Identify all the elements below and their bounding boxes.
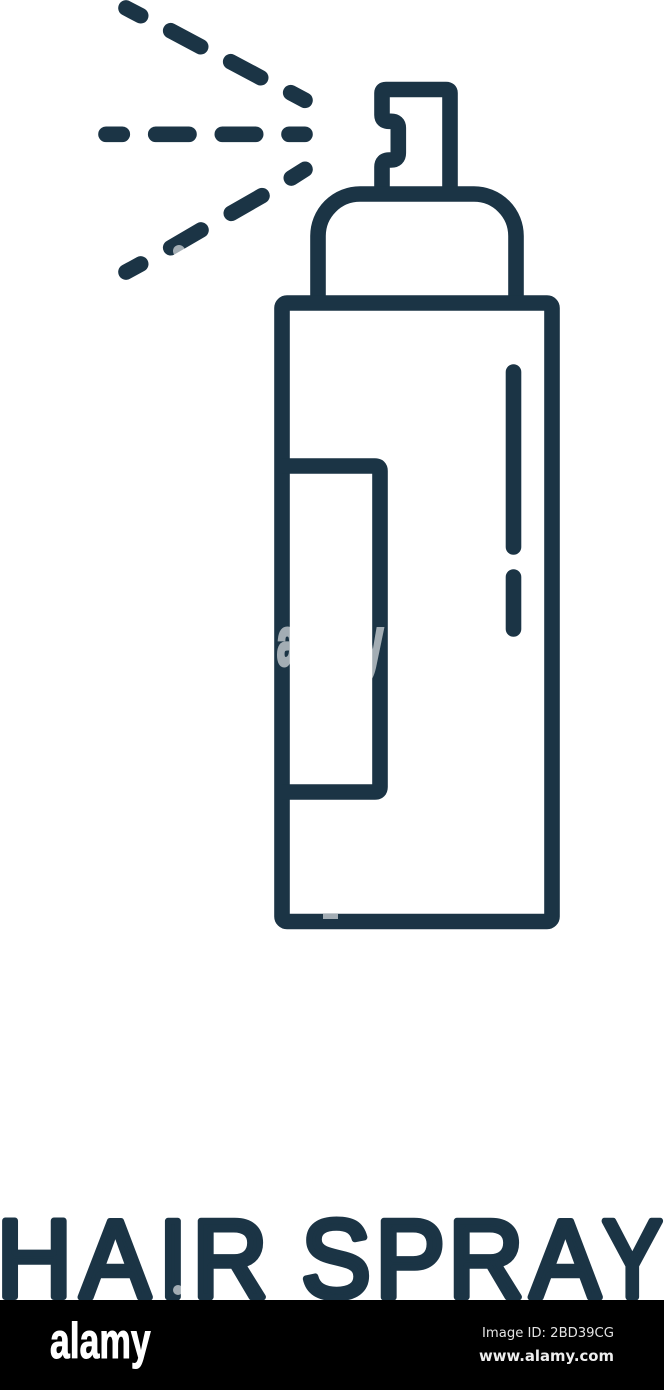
footer bar xyxy=(0,1300,664,1390)
website: www.alamy.com xyxy=(479,1347,614,1365)
watermark fragments: alamy xyxy=(277,603,383,680)
icon: can cap xyxy=(318,194,516,304)
icon: highlight short dash xyxy=(506,577,521,629)
image id: Image ID: 2BD39CG xyxy=(482,1325,614,1341)
icon: nozzle xyxy=(382,90,450,190)
icon: can body xyxy=(282,303,552,922)
title: HAIR SPRA xyxy=(0,1198,601,1321)
title: Y xyxy=(602,1199,662,1321)
watermark fragments xyxy=(173,245,383,1295)
icon: highlight long dash xyxy=(506,372,521,547)
icon: can label xyxy=(282,466,380,792)
icon: hair spray can with spray xyxy=(106,8,552,922)
icon: spray mist dashes xyxy=(106,8,305,272)
logo: alamy xyxy=(50,1314,151,1370)
